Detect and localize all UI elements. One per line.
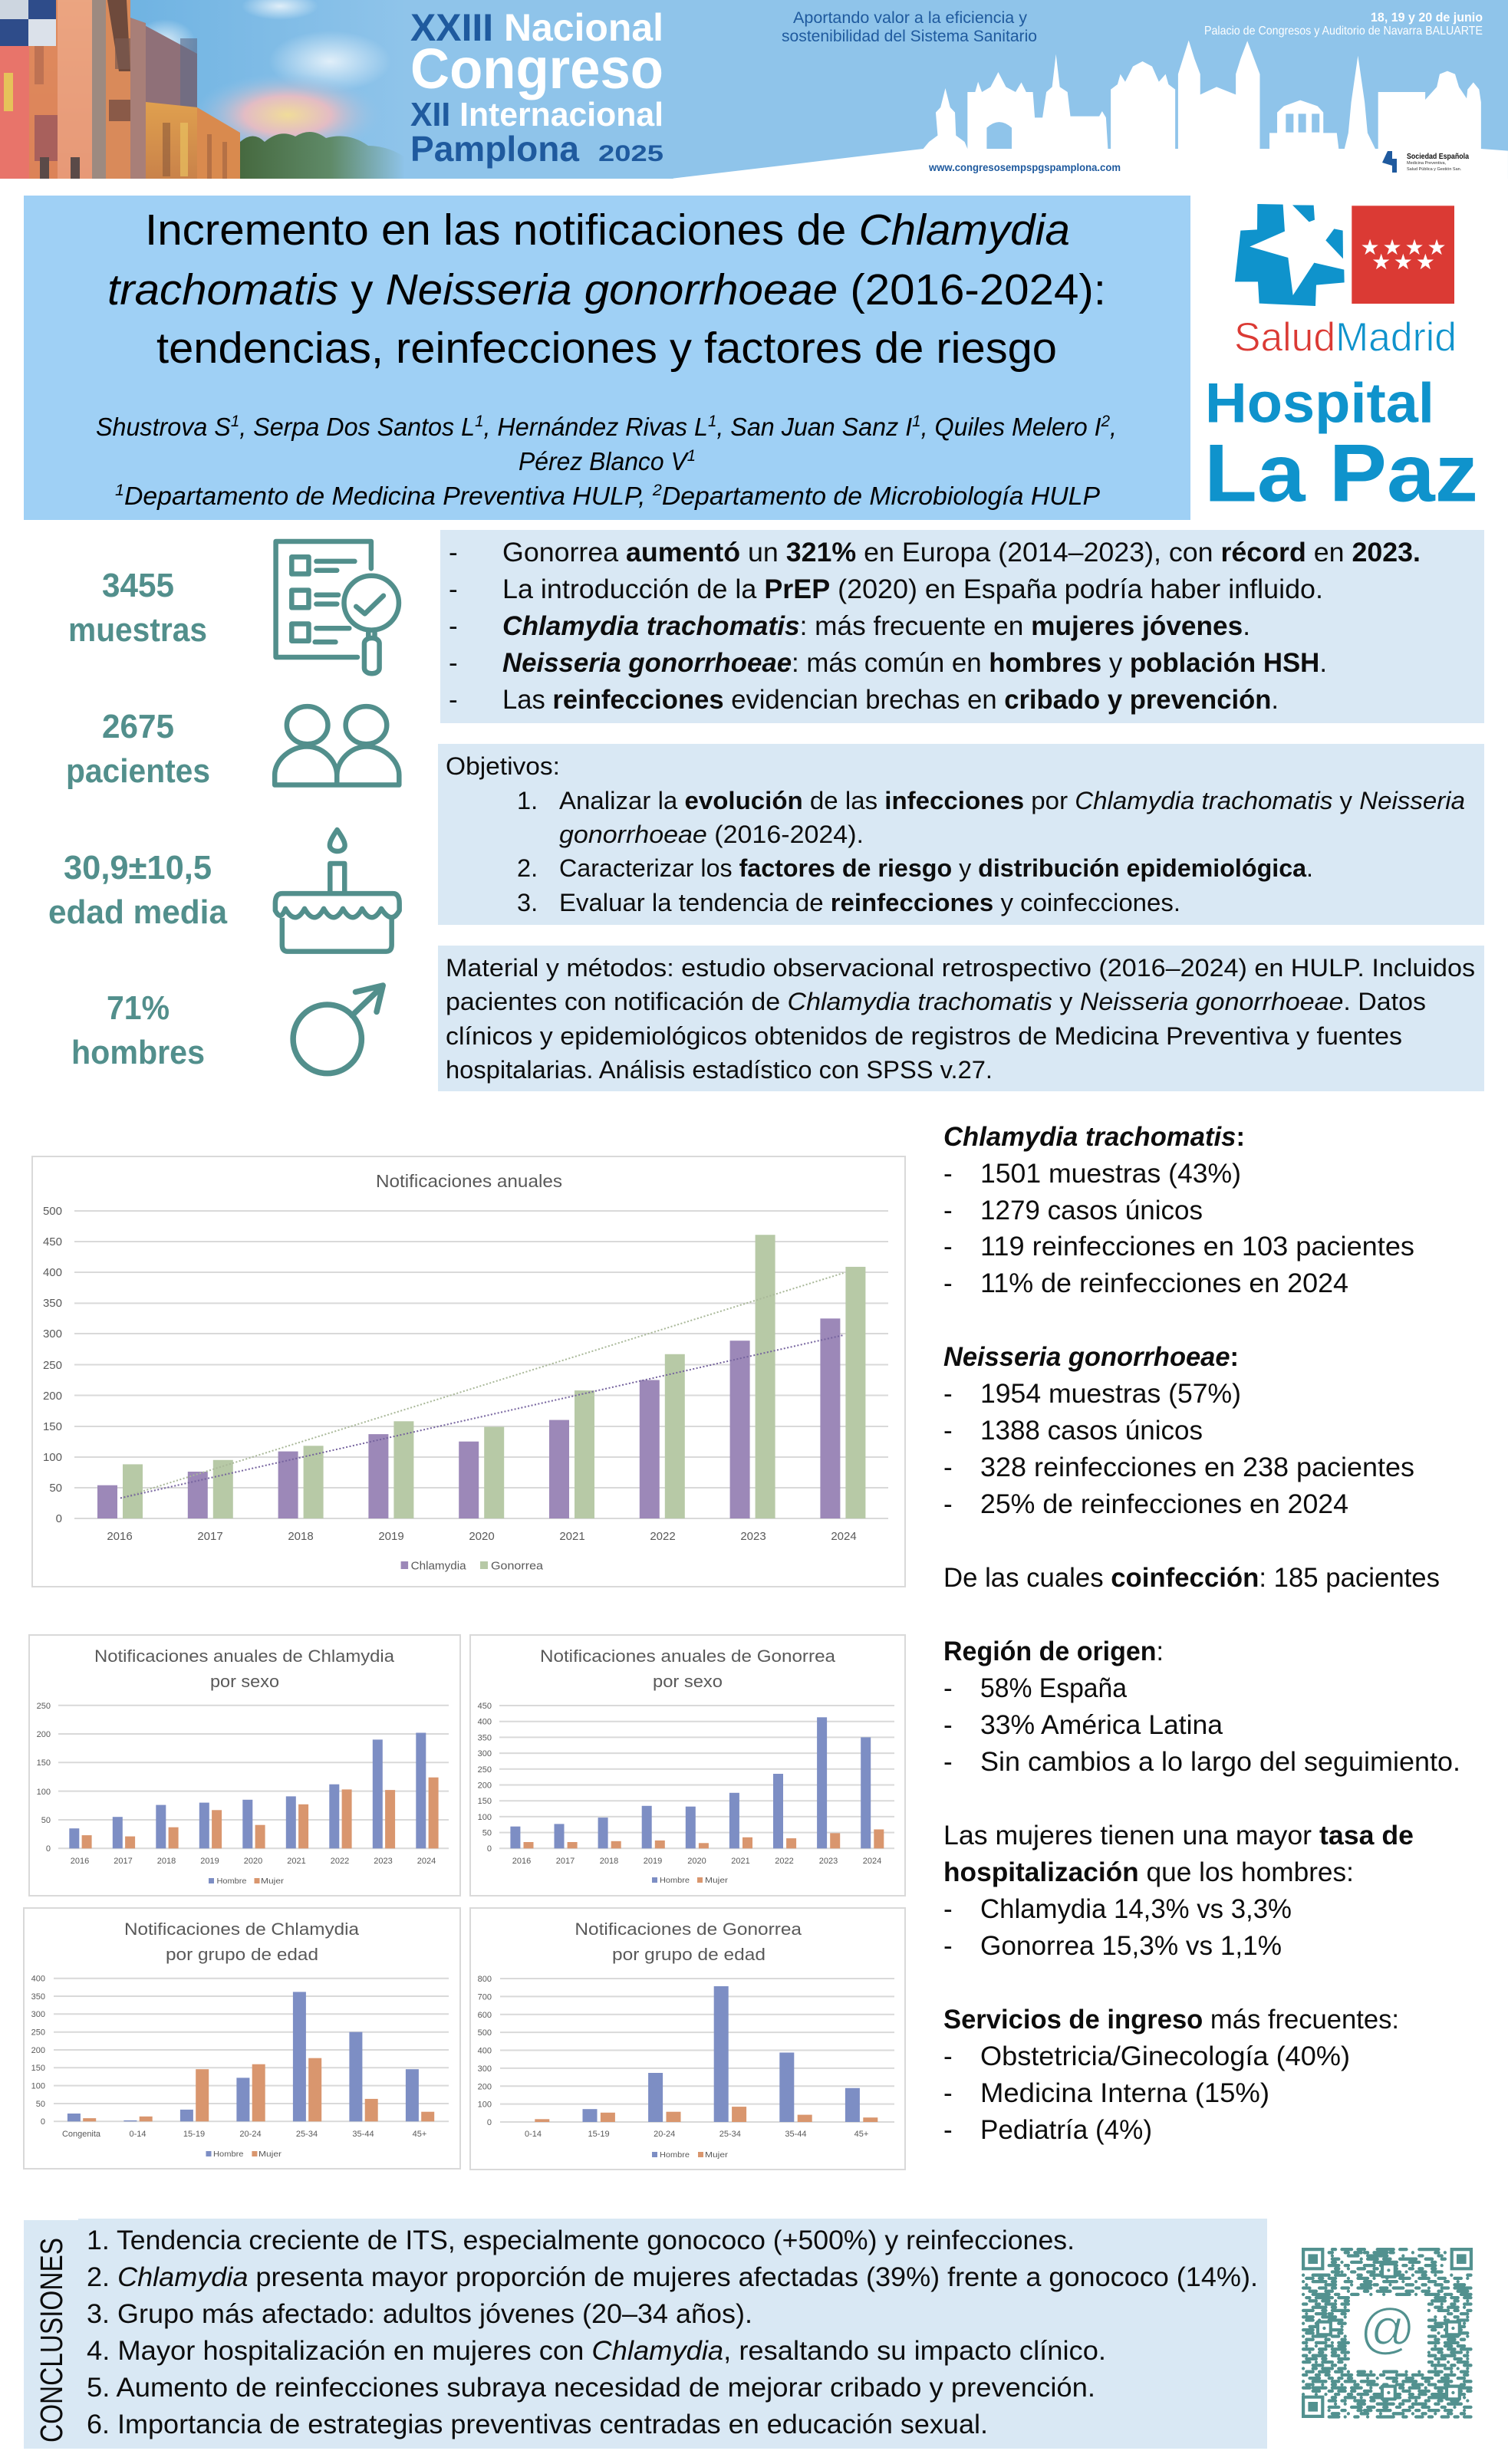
y axis labels: 100 bbox=[43, 1451, 62, 1464]
chart title bbox=[94, 1647, 395, 1691]
panel: methods: hospitalarias. Análisis estadístico con SPSS v.27. bbox=[446, 1056, 993, 1084]
y axis labels: 200 bbox=[478, 1781, 492, 1790]
chart: notificaciones anuales bbox=[32, 1156, 905, 1587]
y axis labels: 300 bbox=[478, 2064, 492, 2074]
y axis labels: 250 bbox=[37, 1702, 51, 1711]
chart title: Notificaciones anuales bbox=[376, 1171, 562, 1191]
y axis labels: 0 bbox=[46, 1844, 51, 1854]
banner photo: Pamplona street bbox=[0, 0, 407, 179]
y axis labels: 350 bbox=[478, 1733, 492, 1742]
title bbox=[107, 206, 1106, 373]
x axis labels: 35-44 bbox=[352, 2130, 374, 2139]
Neisseria results: - bbox=[943, 1452, 953, 1482]
x axis labels: 2020 bbox=[687, 1857, 706, 1866]
y axis labels: 100 bbox=[31, 2082, 45, 2091]
legend: Chlamydia bbox=[411, 1559, 466, 1572]
results text column bbox=[943, 1122, 1460, 2145]
stat: hombres: 71% bbox=[107, 989, 170, 1027]
legend: Gonorrea bbox=[491, 1559, 544, 1572]
authors: 1 bbox=[912, 413, 921, 430]
hospitalization: Chlamydia 14,3% vs 3,3% bbox=[980, 1894, 1292, 1924]
x axis labels: 2019 bbox=[378, 1530, 404, 1543]
hospitalization: Las mujeres tienen una mayor tasa de bbox=[943, 1821, 1414, 1850]
region of origin: Sin cambios a lo largo del seguimiento. bbox=[980, 1747, 1460, 1777]
stat: edad media bbox=[48, 849, 228, 931]
y axis labels: 700 bbox=[478, 1992, 492, 2002]
y axis labels: 500 bbox=[43, 1205, 62, 1218]
y axis labels: 100 bbox=[478, 1813, 492, 1822]
Hospital La Paz wordmark bbox=[1204, 373, 1478, 518]
y axis labels: 350 bbox=[43, 1297, 62, 1310]
x axis labels bbox=[71, 1857, 436, 1866]
bars: Hombre bbox=[583, 1986, 860, 2122]
admission services: - bbox=[943, 2041, 953, 2071]
legend: Hombre bbox=[216, 1877, 247, 1886]
x axis labels: 2017 bbox=[556, 1857, 575, 1866]
stat: hombres: hombres bbox=[71, 1034, 205, 1071]
Neisseria results: - bbox=[943, 1416, 953, 1446]
congress name: Pamplona bbox=[410, 129, 579, 169]
x axis labels: 2022 bbox=[650, 1530, 676, 1543]
y axis labels: 0 bbox=[41, 2117, 45, 2127]
conclusions list: 5. Aumento de reinfecciones subraya necesidad de mejorar cribado y prevención. bbox=[87, 2373, 1095, 2403]
x axis labels: 0-14 bbox=[525, 2130, 542, 2139]
authors: Pérez Blanco V bbox=[519, 447, 693, 475]
chart title: por grupo de edad bbox=[166, 1945, 318, 1964]
icon: Madrid flag with stars: ★ bbox=[1394, 250, 1413, 274]
y axis labels: 150 bbox=[31, 2064, 45, 2073]
x axis labels: 2019 bbox=[200, 1857, 219, 1866]
x axis labels: 2024 bbox=[831, 1530, 857, 1543]
authors: 1 bbox=[231, 413, 239, 430]
y axis labels: 200 bbox=[43, 1390, 62, 1403]
x axis labels: 2023 bbox=[740, 1530, 766, 1543]
bars: Hombre bbox=[69, 1733, 426, 1848]
conclusions list: 4. Mayor hospitalización en mujeres con Chlamydia, resaltando su impacto clínico. bbox=[87, 2336, 1106, 2366]
congress name: Congreso bbox=[410, 37, 663, 100]
panel: background bullets: Neisseria gonorrhoeae: más común en hombres y población HSH. bbox=[502, 648, 1327, 678]
admission services: - bbox=[943, 2115, 953, 2145]
y axis labels: 600 bbox=[478, 2011, 492, 2020]
panel: background bullets: - bbox=[449, 611, 458, 641]
x axis labels: 20-24 bbox=[239, 2130, 262, 2139]
x axis labels: 2020 bbox=[244, 1857, 262, 1866]
x axis labels: 2017 bbox=[114, 1857, 133, 1866]
panel: background bullets: - bbox=[449, 648, 458, 678]
hospitalization: hospitalización que los hombres: bbox=[943, 1857, 1354, 1887]
x axis labels: 2018 bbox=[288, 1530, 314, 1543]
region of origin: - bbox=[943, 1673, 953, 1703]
x axis labels: 2023 bbox=[819, 1857, 838, 1866]
authors: 1 bbox=[687, 447, 696, 465]
Hospital La Paz wordmark: La Paz bbox=[1204, 426, 1478, 518]
x axis labels: 2021 bbox=[731, 1857, 750, 1866]
y axis labels: 50 bbox=[482, 1829, 492, 1838]
panel: objectives: 1. bbox=[517, 787, 538, 814]
Chlamydia results: 11% de reinfecciones en 2024 bbox=[980, 1268, 1348, 1298]
Neisseria results: - bbox=[943, 1489, 953, 1519]
icon: two people bbox=[275, 706, 399, 785]
panel: objectives: gonorrhoeae (2016-2024). bbox=[559, 821, 864, 848]
x axis labels: 15-19 bbox=[183, 2130, 205, 2139]
Neisseria results: 1388 casos únicos bbox=[980, 1416, 1203, 1446]
authors: , San Juan Sanz I bbox=[716, 413, 912, 441]
conclusions list: 6. Importancia de estrategias preventivas centradas en educación sexual. bbox=[87, 2410, 988, 2439]
Neisseria results: Neisseria gonorrhoeae: bbox=[943, 1342, 1239, 1372]
x axis labels bbox=[525, 2130, 868, 2139]
chart: Chlamydia por sexo bbox=[29, 1635, 460, 1896]
x axis labels: 2019 bbox=[644, 1857, 662, 1866]
congress motto: Aportando valor a la eficiencia y bbox=[793, 9, 1028, 27]
Chlamydia results: Chlamydia trachomatis: bbox=[943, 1122, 1245, 1152]
y axis labels bbox=[478, 1702, 492, 1854]
x axis labels: 2024 bbox=[863, 1857, 881, 1866]
stat: edad media: edad media bbox=[48, 893, 228, 931]
region of origin: Región de origen: bbox=[943, 1637, 1164, 1666]
panel: background bullets: - bbox=[449, 538, 458, 567]
y axis labels: 250 bbox=[43, 1359, 62, 1372]
Chlamydia results: - bbox=[943, 1232, 953, 1262]
stat: muestras: 3455 bbox=[102, 567, 174, 604]
authors: , Quiles Melero I bbox=[921, 413, 1101, 441]
conclusions list: 3. Grupo más afectado: adultos jóvenes (20–34 años). bbox=[87, 2299, 752, 2329]
chart title: Notificaciones anuales de Chlamydia bbox=[94, 1647, 395, 1666]
legend: Hombre bbox=[660, 1876, 690, 1885]
y axis labels: 300 bbox=[43, 1327, 62, 1341]
y axis labels: 0 bbox=[487, 1844, 492, 1854]
authors: , bbox=[1110, 413, 1117, 441]
panel: objectives bbox=[438, 744, 1484, 925]
admission services: - bbox=[943, 2078, 953, 2108]
y axis labels bbox=[31, 1975, 45, 2127]
y axis labels: 200 bbox=[478, 2082, 492, 2091]
congress name: 2025 bbox=[598, 141, 663, 166]
authors bbox=[96, 413, 1117, 510]
website: www.congresosempspgspamplona.com bbox=[928, 161, 1121, 173]
authors: 1 bbox=[115, 482, 124, 499]
society logo: Sociedad Española bbox=[1407, 153, 1469, 161]
chart title: Notificaciones anuales de Gonorrea bbox=[540, 1647, 836, 1666]
bars: Mujer bbox=[82, 1778, 439, 1848]
authors: 2 bbox=[1101, 413, 1110, 430]
panel: background bullets: Gonorrea aumentó un 321% en Europa (2014–2023), con récord en 2023. bbox=[502, 538, 1421, 567]
panel: background bullets: - bbox=[449, 685, 458, 715]
bars: Gonorrea bbox=[123, 1235, 865, 1518]
chart: Gonorrea por edad bbox=[470, 1908, 905, 2170]
y axis labels: 0 bbox=[56, 1512, 62, 1525]
chart title: por sexo bbox=[653, 1672, 723, 1691]
date and venue: Palacio de Congresos y Auditorio de Navarra BALUARTE bbox=[1204, 25, 1483, 38]
panel: objectives: Evaluar la tendencia de reinfecciones y coinfecciones. bbox=[559, 889, 1180, 916]
panel: background bullets: La introducción de la PrEP (2020) en España podría haber influido. bbox=[502, 574, 1323, 604]
chart: Gonorrea por sexo bbox=[470, 1635, 905, 1896]
conclusions list: 2. Chlamydia presenta mayor proporción de mujeres afectadas (39%) frente a gonococo (14%). bbox=[87, 2262, 1258, 2292]
bars: Mujer bbox=[535, 2107, 877, 2122]
Hospital La Paz wordmark: Hospital bbox=[1205, 373, 1434, 435]
icon: SaludMadrid cross with star bbox=[1235, 204, 1345, 306]
x axis labels: 45+ bbox=[413, 2130, 426, 2139]
society logo bbox=[1382, 151, 1469, 173]
panel: methods: Material y métodos: estudio observacional retrospectivo (2016–2024) en HULP. Incluidos bbox=[446, 954, 1475, 982]
x axis labels: 15-19 bbox=[588, 2130, 610, 2139]
panel: methods: clínicos y epidemiológicos obtenidos de registros de Medicina Preventiva y fuentes bbox=[446, 1022, 1402, 1050]
Chlamydia results: - bbox=[943, 1196, 953, 1225]
Chlamydia results: 119 reinfecciones en 103 pacientes bbox=[980, 1232, 1414, 1262]
panel: objectives: 3. bbox=[517, 889, 538, 916]
Neisseria results: 25% de reinfecciones en 2024 bbox=[980, 1489, 1348, 1519]
authors: Departamento de Medicina Preventiva HULP, bbox=[124, 482, 653, 510]
QR finder patterns bbox=[1302, 2248, 1473, 2418]
stat: pacientes bbox=[66, 708, 210, 790]
authors: 2 bbox=[652, 482, 662, 499]
icon: male symbol bbox=[293, 985, 383, 1074]
hospitalization: - bbox=[943, 1931, 953, 1961]
bars: Chlamydia bbox=[97, 1318, 840, 1518]
region of origin bbox=[943, 1637, 1460, 1777]
region of origin: 58% España bbox=[980, 1673, 1128, 1703]
y axis labels bbox=[43, 1205, 62, 1525]
y axis labels bbox=[37, 1702, 51, 1854]
Neisseria results bbox=[943, 1342, 1414, 1519]
y axis labels: 300 bbox=[478, 1749, 492, 1758]
icon: Madrid flag with stars: ★ bbox=[1382, 235, 1402, 259]
Chlamydia results: 1279 casos únicos bbox=[980, 1196, 1203, 1225]
congress motto bbox=[782, 9, 1037, 45]
x axis labels bbox=[512, 1857, 881, 1866]
y axis labels: 450 bbox=[43, 1235, 62, 1248]
y axis labels: 50 bbox=[49, 1482, 62, 1495]
authors: Departamento de Microbiología HULP bbox=[662, 482, 1100, 510]
x axis labels: 2016 bbox=[107, 1530, 133, 1543]
Neisseria results: 1954 muestras (57%) bbox=[980, 1379, 1241, 1409]
stat: muestras bbox=[68, 567, 207, 649]
chart: Chlamydia por edad bbox=[24, 1908, 460, 2169]
x axis labels: 2021 bbox=[287, 1857, 306, 1866]
y axis labels: 200 bbox=[31, 2046, 45, 2055]
stat: hombres bbox=[71, 989, 205, 1071]
admission services: Obstetricia/Ginecología (40%) bbox=[980, 2041, 1350, 2071]
x axis labels: Congenita bbox=[62, 2130, 101, 2139]
conclusions list: 1. Tendencia creciente de ITS, especialmente gonococo (+500%) y reinfecciones. bbox=[87, 2225, 1075, 2255]
y axis labels: 800 bbox=[478, 1975, 492, 1984]
panel: background bullets: Chlamydia trachomatis: más frecuente en mujeres jóvenes. bbox=[502, 611, 1250, 641]
x axis labels: 2016 bbox=[71, 1857, 89, 1866]
panel: background bullets: - bbox=[449, 574, 458, 604]
y axis labels: 150 bbox=[43, 1420, 62, 1433]
icon: Madrid flag with stars bbox=[1352, 206, 1454, 304]
authors: , Hernández Rivas L bbox=[484, 413, 708, 441]
y axis labels: 100 bbox=[478, 2100, 492, 2110]
chart title: Notificaciones de Chlamydia bbox=[124, 1920, 360, 1939]
chart title bbox=[575, 1920, 802, 1964]
Chlamydia results bbox=[943, 1122, 1414, 1298]
y axis labels bbox=[478, 1975, 492, 2127]
authors: Shustrova S bbox=[96, 413, 234, 441]
chart title: por sexo bbox=[210, 1672, 279, 1691]
panel: objectives: Objetivos: bbox=[446, 752, 560, 780]
Neisseria results: - bbox=[943, 1379, 953, 1409]
legend: Mujer bbox=[705, 2150, 729, 2160]
y axis labels: 50 bbox=[36, 2100, 45, 2109]
legend: Mujer bbox=[261, 1877, 285, 1886]
icon: checklist with magnifier bbox=[276, 541, 399, 673]
x axis labels: 2018 bbox=[600, 1857, 618, 1866]
x axis labels: 2024 bbox=[417, 1857, 436, 1866]
panel: objectives: Caracterizar los factores de riesgo y distribución epidemiológica. bbox=[559, 854, 1313, 882]
authors: 1 bbox=[475, 413, 484, 430]
y axis labels: 150 bbox=[37, 1758, 51, 1768]
panel: methods: pacientes con notificación de Chlamydia trachomatis y Neisseria gonorrhoeae . Datos bbox=[446, 988, 1426, 1015]
panel: objectives: 2. bbox=[517, 854, 538, 882]
legend: Hombre bbox=[660, 2150, 690, 2160]
QR at sign: @ bbox=[1359, 2298, 1416, 2360]
y axis labels: 0 bbox=[487, 2118, 492, 2127]
x axis labels: 2022 bbox=[775, 1857, 794, 1866]
stat: pacientes: 2675 bbox=[102, 708, 174, 745]
y axis labels: 300 bbox=[31, 2010, 45, 2019]
authors: 1 bbox=[708, 413, 716, 430]
hospitalization bbox=[943, 1821, 1414, 1961]
x axis labels: 2023 bbox=[374, 1857, 393, 1866]
congress motto: sostenibilidad del Sistema Sanitario bbox=[782, 28, 1037, 45]
bars: Hombre bbox=[510, 1717, 871, 1848]
legend bbox=[401, 1559, 544, 1572]
admission services: Medicina Interna (15%) bbox=[980, 2078, 1269, 2108]
y axis labels: 450 bbox=[478, 1702, 492, 1711]
date and venue: 18, 19 y 20 de junio bbox=[1371, 10, 1483, 25]
y axis labels: 400 bbox=[31, 1975, 45, 1984]
region of origin: 33% América Latina bbox=[980, 1710, 1223, 1740]
x axis labels: 2018 bbox=[157, 1857, 176, 1866]
icon: Madrid flag with stars: ★ bbox=[1360, 235, 1380, 259]
chart title: Notificaciones de Gonorrea bbox=[575, 1920, 802, 1939]
y axis labels: 400 bbox=[478, 1718, 492, 1727]
authors: , Serpa Dos Santos L bbox=[239, 413, 475, 441]
chart title: por grupo de edad bbox=[612, 1945, 766, 1964]
key statistics column bbox=[48, 541, 400, 1074]
x axis labels: 2021 bbox=[559, 1530, 585, 1543]
x axis labels: 0-14 bbox=[129, 2130, 147, 2139]
x axis labels: 2017 bbox=[197, 1530, 223, 1543]
panel: objectives: Analizar la evolución de las infecciones por Chlamydia trachomatis y Neisseria bbox=[559, 787, 1465, 814]
Chlamydia results: - bbox=[943, 1159, 953, 1189]
Chlamydia results: - bbox=[943, 1268, 953, 1298]
legend bbox=[652, 1876, 729, 1885]
title: trachomatis y Neisseria gonorrhoeae (2016-2024): bbox=[107, 265, 1106, 314]
icon: Madrid flag with stars: ★ bbox=[1416, 250, 1435, 274]
congress name: XXIII Nacional bbox=[410, 6, 663, 49]
x axis labels: 2022 bbox=[331, 1857, 349, 1866]
x axis labels: 35-44 bbox=[785, 2130, 806, 2139]
bars: Hombre bbox=[67, 1992, 419, 2121]
stat: edad media: 30,9±10,5 bbox=[64, 849, 212, 887]
x axis labels: 2020 bbox=[469, 1530, 495, 1543]
coinfection: De las cuales coinfección: 185 pacientes bbox=[943, 1563, 1440, 1593]
panel: background bullets: Las reinfecciones evidencian brechas en cribado y prevención. bbox=[502, 685, 1279, 715]
x axis labels bbox=[62, 2130, 426, 2139]
trend lines bbox=[120, 1273, 844, 1498]
y axis labels: 100 bbox=[37, 1788, 51, 1797]
legend bbox=[209, 1877, 285, 1886]
icon: birthday cake bbox=[275, 830, 400, 952]
y axis labels: 50 bbox=[41, 1816, 51, 1825]
congress name bbox=[410, 6, 663, 169]
y axis labels: 500 bbox=[478, 2028, 492, 2038]
admission services: Pediatría (4%) bbox=[980, 2115, 1152, 2145]
region of origin: - bbox=[943, 1747, 953, 1777]
y axis labels: 400 bbox=[478, 2046, 492, 2055]
icon: Madrid flag with stars: ★ bbox=[1371, 250, 1391, 274]
chart title bbox=[540, 1647, 836, 1691]
y axis labels: 250 bbox=[31, 2028, 45, 2038]
title panel bbox=[24, 196, 1190, 520]
congress name: XII Internacional bbox=[410, 96, 663, 133]
region of origin: - bbox=[943, 1710, 953, 1740]
legend bbox=[206, 2150, 282, 2159]
conclusions list bbox=[87, 2225, 1258, 2439]
x axis labels: 45+ bbox=[854, 2130, 868, 2139]
hospitalization: Gonorrea 15,3% vs 1,1% bbox=[980, 1931, 1282, 1961]
stat: pacientes: pacientes bbox=[66, 752, 210, 790]
conclusions side label bbox=[24, 2220, 78, 2449]
y axis labels: 150 bbox=[478, 1797, 492, 1806]
y axis labels: 250 bbox=[478, 1765, 492, 1775]
legend: Hombre bbox=[213, 2150, 244, 2159]
title: tendencias, reinfecciones y factores de riesgo bbox=[156, 324, 1057, 373]
society logo: Salud Pública y Gestión San. bbox=[1407, 167, 1462, 172]
date and venue bbox=[1204, 10, 1483, 38]
legend: Mujer bbox=[258, 2150, 282, 2159]
header banner bbox=[0, 0, 1508, 179]
bars: Mujer bbox=[83, 2058, 434, 2121]
skyline silhouette bbox=[673, 41, 1508, 179]
title: Incremento en las notificaciones de Chlamydia bbox=[145, 206, 1070, 255]
panel: conclusions bbox=[24, 2219, 1267, 2449]
x axis labels: 25-34 bbox=[296, 2130, 318, 2139]
panel: methods bbox=[438, 946, 1484, 1091]
panel: background bullets bbox=[440, 530, 1484, 723]
Chlamydia results: 1501 muestras (43%) bbox=[980, 1159, 1241, 1189]
icon: Madrid flag with stars: ★ bbox=[1427, 235, 1447, 259]
x axis labels: 20-24 bbox=[654, 2130, 675, 2139]
SaludMadrid wordmark: SaludMadrid bbox=[1234, 315, 1457, 360]
chart title bbox=[124, 1920, 360, 1964]
icon: Madrid flag with stars: ★ bbox=[1404, 235, 1424, 259]
bars: Mujer bbox=[523, 1830, 884, 1848]
x axis labels bbox=[107, 1530, 857, 1543]
QR code bbox=[1302, 2248, 1473, 2418]
conclusions side label: CONCLUSIONES bbox=[34, 2238, 69, 2443]
hospital logos bbox=[1204, 204, 1478, 518]
y axis labels: 400 bbox=[43, 1266, 62, 1279]
y axis labels: 200 bbox=[37, 1730, 51, 1739]
admission services bbox=[943, 2005, 1399, 2145]
x axis labels: 2016 bbox=[512, 1857, 531, 1866]
stat: muestras: muestras bbox=[68, 611, 207, 649]
hospitalization: - bbox=[943, 1894, 953, 1924]
x axis labels: 25-34 bbox=[719, 2130, 741, 2139]
society logo: Medicina Preventiva, bbox=[1407, 161, 1447, 166]
y axis labels: 350 bbox=[31, 1992, 45, 2002]
Neisseria results: 328 reinfecciones en 238 pacientes bbox=[980, 1452, 1414, 1482]
legend bbox=[652, 2150, 729, 2160]
admission services: Servicios de ingreso más frecuentes: bbox=[943, 2005, 1399, 2035]
legend: Mujer bbox=[705, 1876, 729, 1885]
